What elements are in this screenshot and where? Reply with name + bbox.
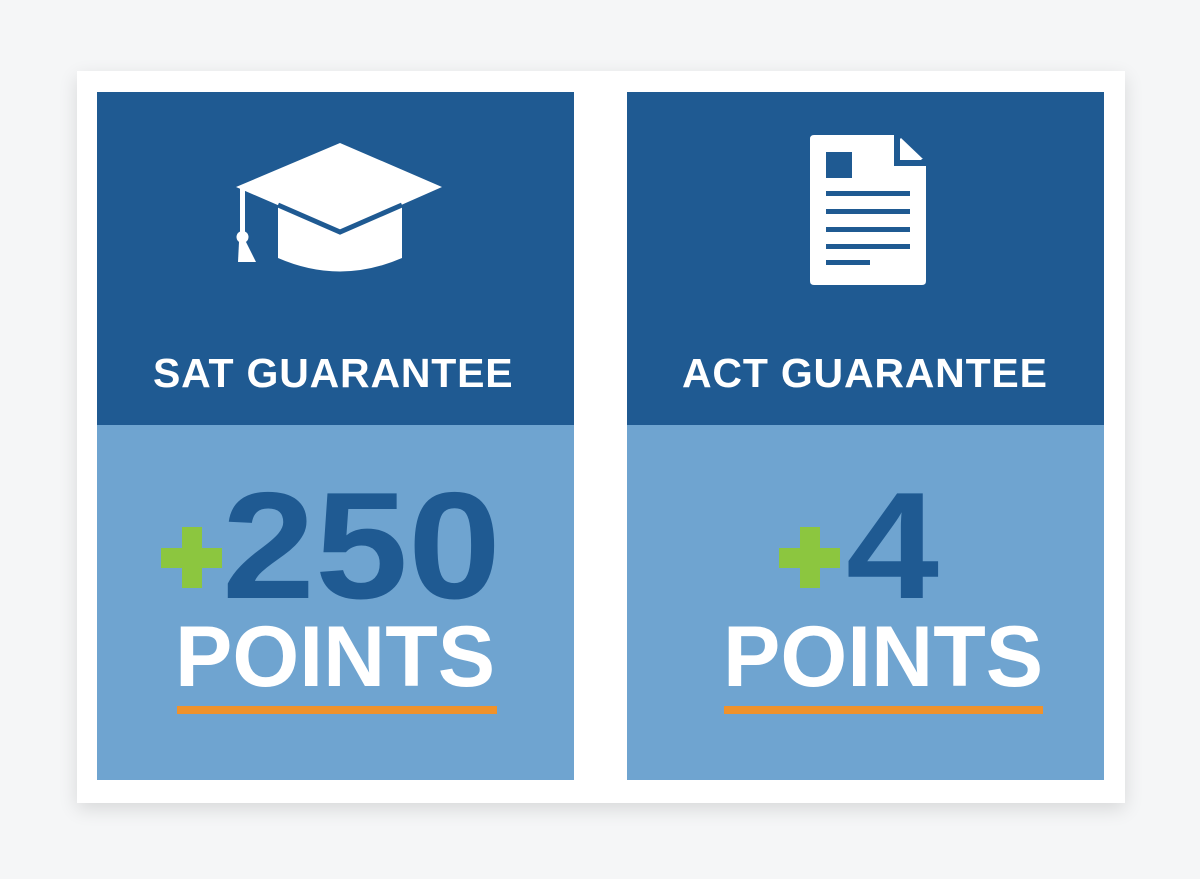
heading: ACT GUARANTEE: ACT GUARANTEE [682, 350, 1048, 396]
heading: SAT GUARANTEE: SAT GUARANTEE [153, 350, 513, 396]
underline SAT [177, 706, 497, 714]
number: 4: 4 [846, 461, 939, 631]
icon: graduation cap [236, 143, 442, 272]
card [77, 71, 1125, 803]
icon: plus SAT [161, 527, 222, 588]
text: POINTS SAT: POINTS [175, 609, 495, 705]
icon: document [810, 135, 926, 285]
icon: plus ACT [779, 527, 840, 588]
panel: ACT [627, 92, 1104, 780]
underline ACT [724, 706, 1043, 714]
number: 250: 250 [222, 461, 501, 631]
panel: SAT [97, 92, 574, 780]
text: POINTS ACT: POINTS [723, 609, 1043, 705]
